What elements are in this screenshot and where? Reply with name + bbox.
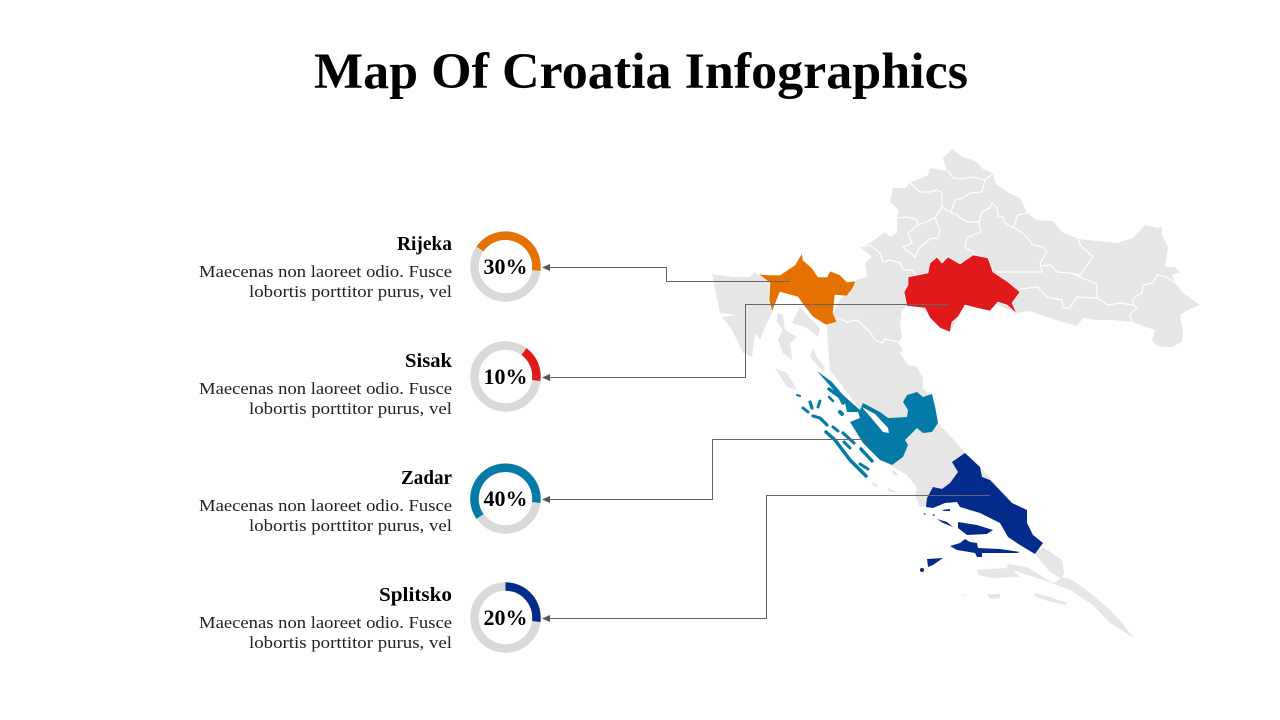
donut: 10%: 10% xyxy=(484,364,528,389)
text: Rijeka description: lobortis porttitor purus, vel xyxy=(249,282,452,301)
heading: Rijeka: Rijeka xyxy=(397,233,452,255)
title: Map Of Croatia Infographics xyxy=(314,44,968,100)
connector: Sisak xyxy=(542,304,948,381)
donut: 40% xyxy=(474,468,536,530)
panel: Sisak xyxy=(199,346,536,418)
map: grey base country xyxy=(712,149,1200,638)
text: Rijeka description: Maecenas non laoreet odio. Fusce xyxy=(199,262,452,281)
text: Zadar description: Maecenas non laoreet odio. Fusce xyxy=(199,496,452,515)
donut: 20% xyxy=(474,586,536,648)
heading: Zadar: Zadar xyxy=(401,467,452,489)
text: Sisak description: lobortis porttitor purus, vel xyxy=(249,399,452,418)
panel: Splitsko xyxy=(199,584,536,652)
text: Rijeka description xyxy=(199,262,452,301)
map: Zadar region xyxy=(797,371,938,476)
text: Splitsko description: Maecenas non laoreet odio. Fusce xyxy=(199,613,452,632)
text: Zadar description: lobortis porttitor purus, vel xyxy=(249,516,452,535)
text: Splitsko description: lobortis porttitor purus, vel xyxy=(249,633,452,652)
text: Sisak description xyxy=(199,379,452,418)
donut: 10% xyxy=(474,346,536,408)
map: county borders xyxy=(837,171,1175,343)
text: Splitsko description xyxy=(199,613,452,652)
map: Splitsko region xyxy=(920,453,1043,572)
map of Croatia xyxy=(712,149,1200,638)
connector: Rijeka xyxy=(542,264,790,282)
connector: Zadar xyxy=(542,440,868,503)
donut: 40%: 40% xyxy=(484,486,528,511)
map: Peljesac and southern strip xyxy=(977,564,1134,638)
heading: Sisak: Sisak xyxy=(405,350,453,372)
panel: Rijeka xyxy=(199,233,536,301)
donut: 30% xyxy=(474,236,536,298)
heading: Splitsko: Splitsko xyxy=(379,584,452,606)
text: Zadar description xyxy=(199,496,452,535)
map: Dubrovnik mainland xyxy=(1035,547,1064,579)
text: Sisak description: Maecenas non laoreet odio. Fusce xyxy=(199,379,452,398)
map: Sisak region xyxy=(904,255,1020,332)
panel: Zadar xyxy=(199,467,536,535)
donut: 30%: 30% xyxy=(484,254,528,279)
donut: 20%: 20% xyxy=(484,605,528,630)
connector: Splitsko xyxy=(542,496,990,622)
map: Rijeka region xyxy=(758,253,856,325)
